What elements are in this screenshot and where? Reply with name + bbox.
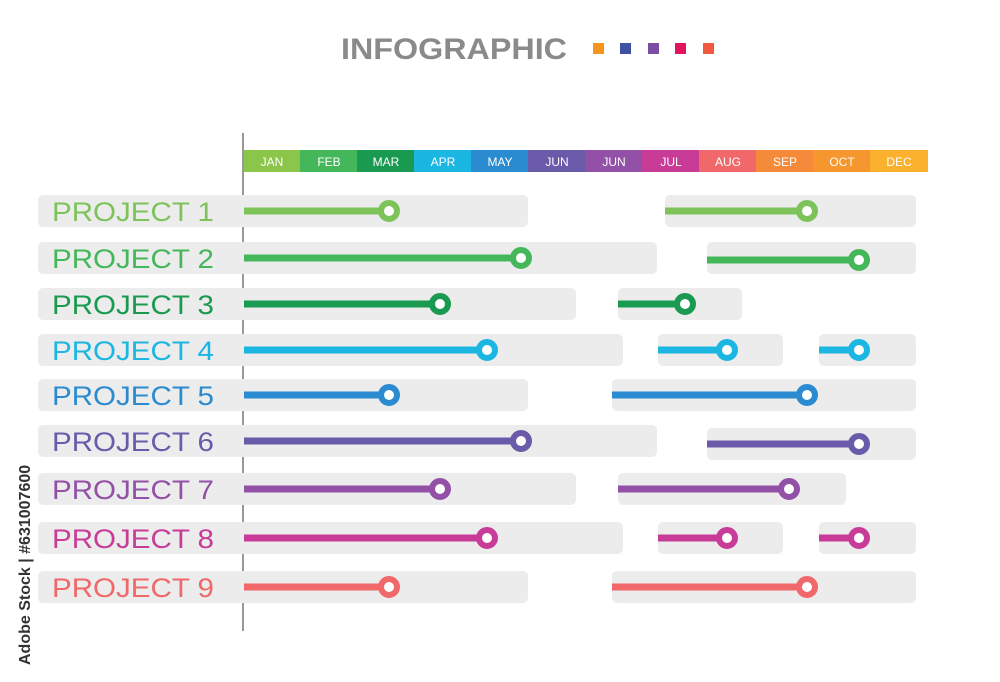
project rows xyxy=(38,195,916,603)
title xyxy=(341,33,714,66)
row: project 9 xyxy=(38,571,916,603)
row: project 3: PROJECT 3 xyxy=(52,290,214,320)
row: project 2: PROJECT 2 xyxy=(52,244,214,274)
row: project 9: PROJECT 9 xyxy=(52,573,214,603)
month header: DEC xyxy=(886,155,912,169)
month header: JAN xyxy=(261,155,283,169)
month header xyxy=(243,150,928,172)
row: project 6 xyxy=(38,425,916,460)
month header: FEB xyxy=(317,155,341,169)
row: project 2 xyxy=(38,242,916,274)
month header: JUN xyxy=(545,155,569,169)
month header: SEP xyxy=(773,155,797,169)
row: project 5: PROJECT 5 xyxy=(52,381,214,411)
row: project 6: PROJECT 6 xyxy=(52,427,214,457)
axis line xyxy=(242,133,244,631)
row: project 1 xyxy=(38,195,916,227)
month header: APR xyxy=(431,155,456,169)
row: project 5 xyxy=(38,379,916,411)
row: project 8: PROJECT 8 xyxy=(52,524,214,554)
watermark text: Adobe Stock | #631007600 xyxy=(17,465,34,665)
month header: MAR xyxy=(373,155,400,169)
row: project 4: PROJECT 4 xyxy=(52,336,214,366)
row: project 1: PROJECT 1 xyxy=(52,197,214,227)
row: project 4 xyxy=(38,334,916,366)
month header: JUL xyxy=(660,155,682,169)
month header: AUG xyxy=(715,155,741,169)
row: project 7: PROJECT 7 xyxy=(52,475,214,505)
month header: OCT xyxy=(829,155,855,169)
title: INFOGRAPHIC xyxy=(341,33,567,66)
row: project 7 xyxy=(38,473,846,505)
month header: MAY xyxy=(487,155,513,169)
month header: JUN xyxy=(602,155,626,169)
row: project 3 xyxy=(38,288,742,320)
row: project 8 xyxy=(38,522,916,554)
